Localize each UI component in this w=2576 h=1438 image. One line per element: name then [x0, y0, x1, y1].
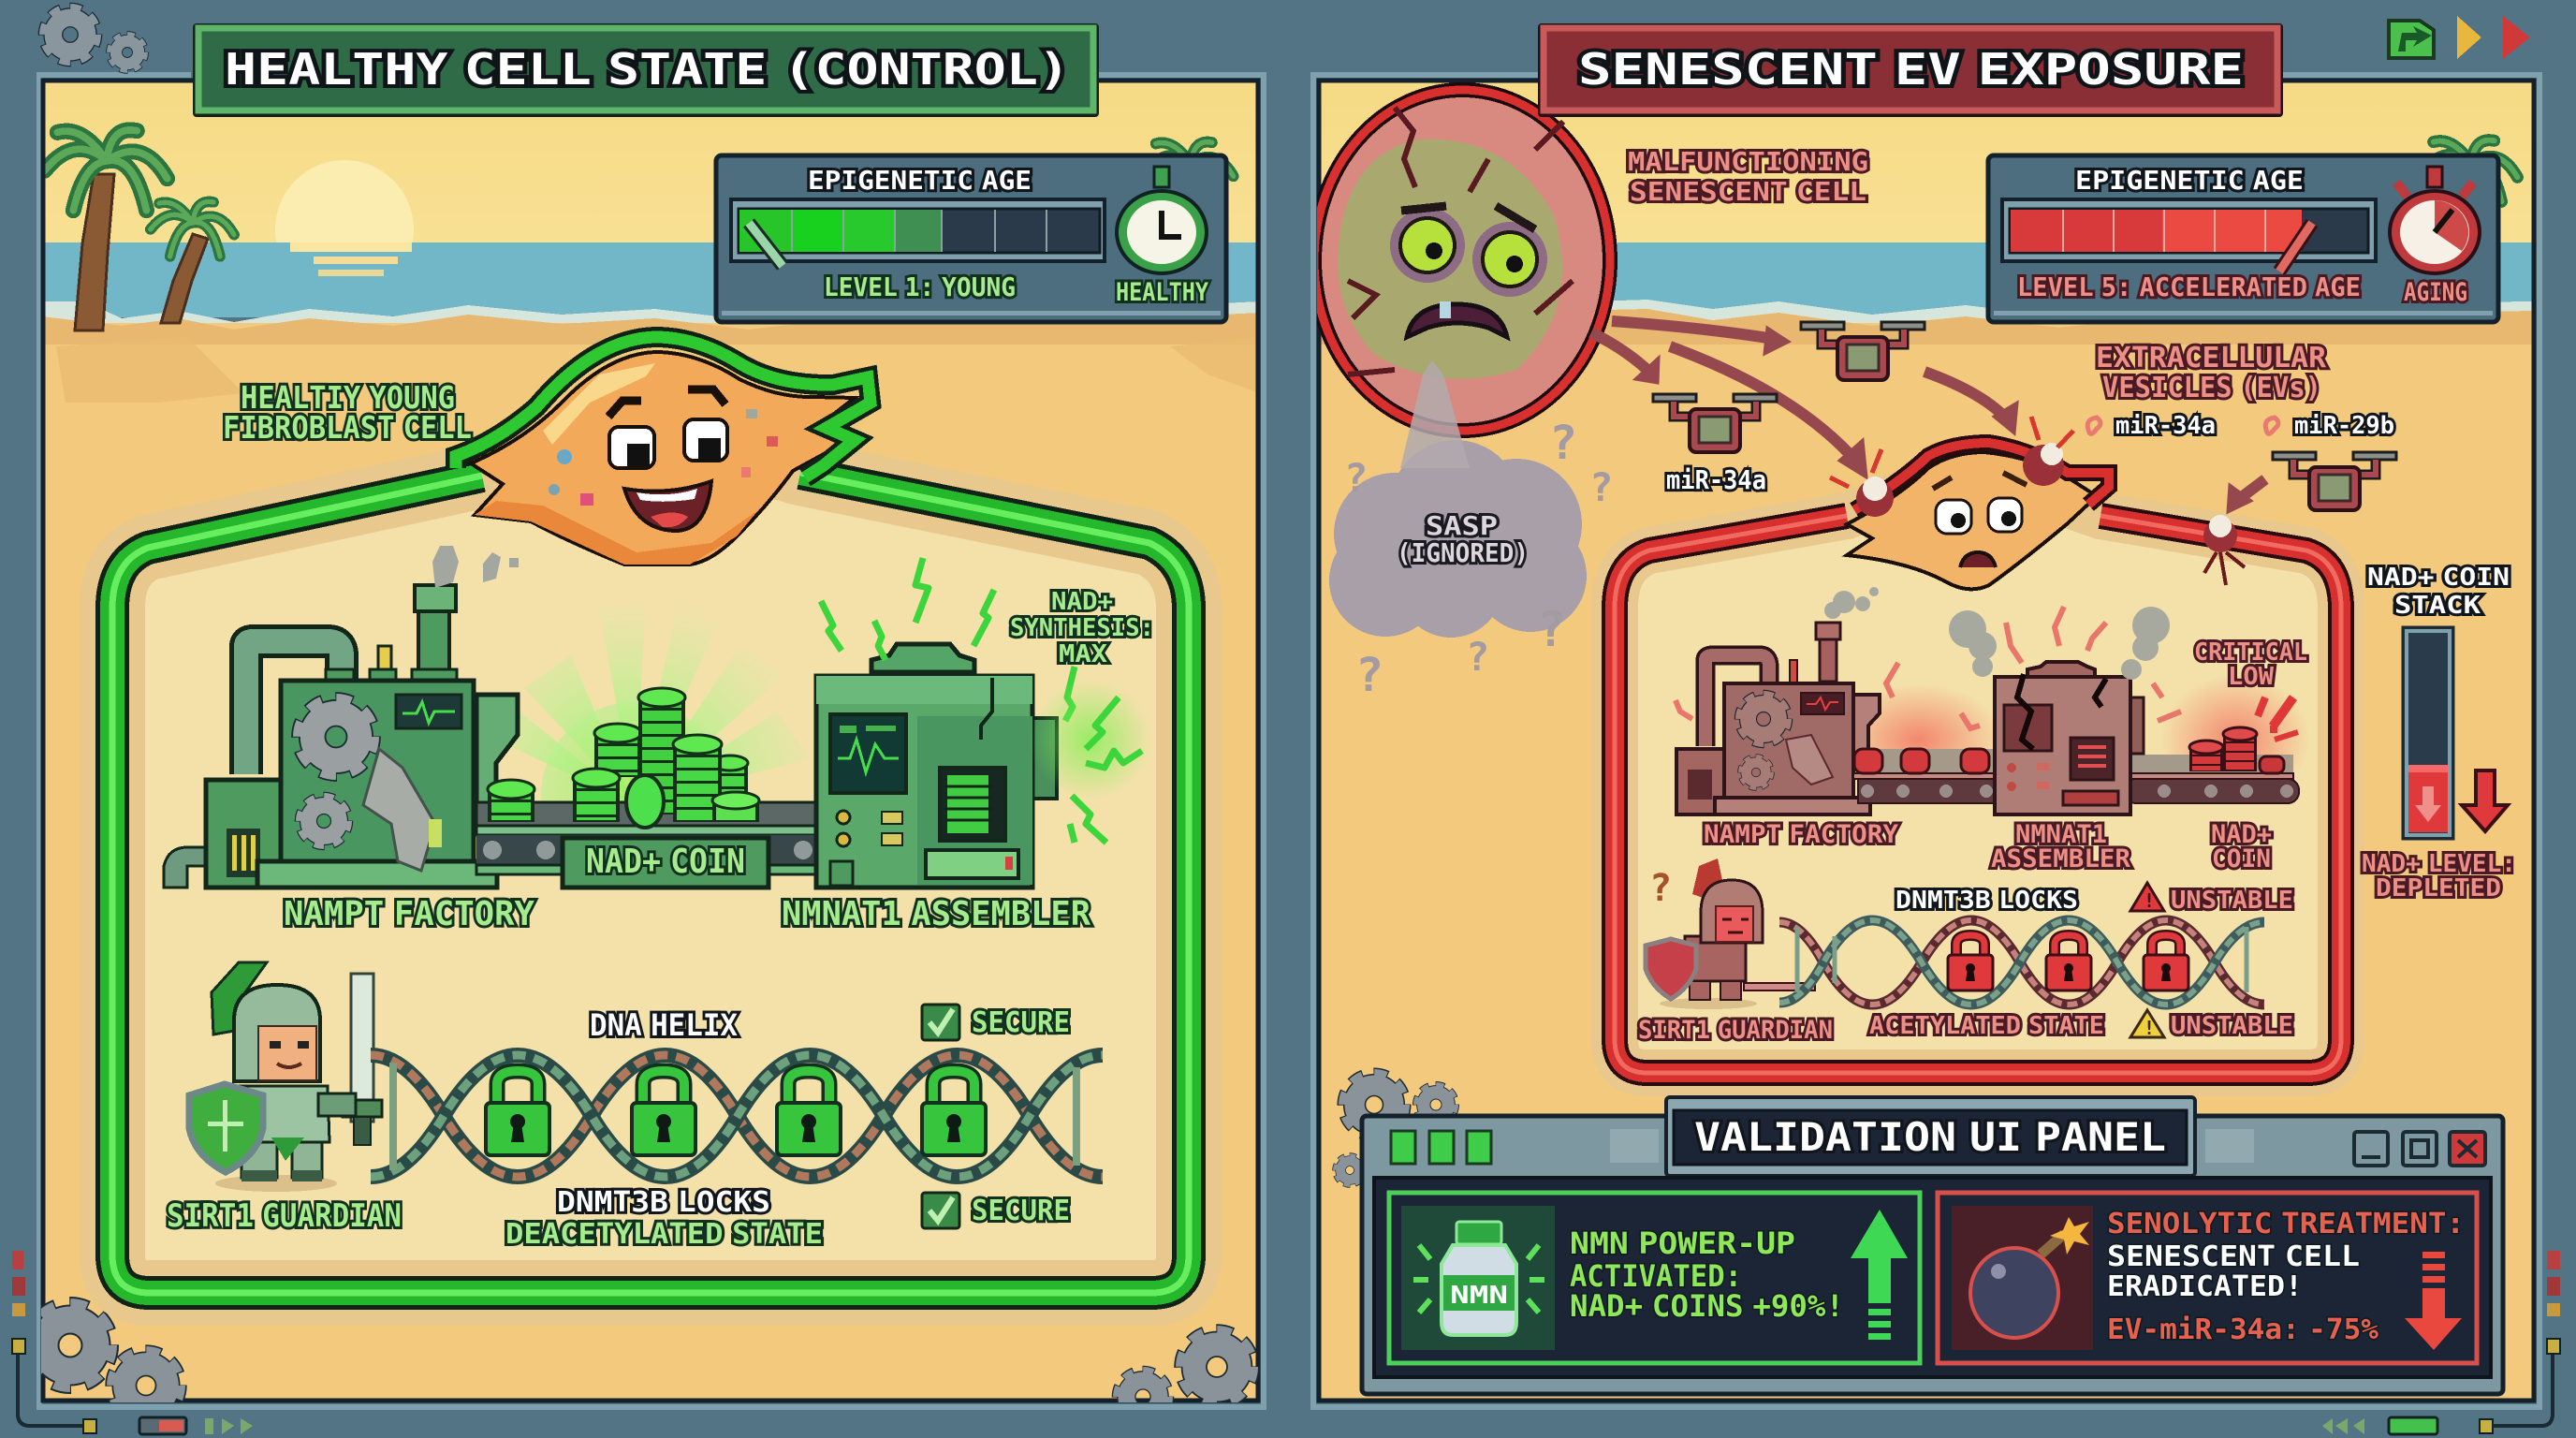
bottom right console decor — [2322, 1251, 2560, 1434]
card: NMN power-up — [1389, 1193, 1920, 1363]
panel title tab — [1666, 1097, 2195, 1176]
cell membrane damaged — [1615, 468, 2341, 1073]
label: critical low: LOW — [2228, 663, 2274, 691]
label: SIRT1 guardian: SIRT1 GUARDIAN — [167, 1197, 402, 1235]
label: critical low: CRITICAL — [2194, 638, 2307, 667]
label: NAD+ synthesis max — [1010, 588, 1154, 668]
card: senolytic treatment — [1938, 1193, 2477, 1363]
label plate: NAD+ coin: NAD+ COIN — [586, 843, 745, 881]
broken NMNAT1 assembler — [1995, 662, 2144, 814]
panel frame — [39, 75, 1264, 1407]
secure badge bottom: SECURE — [972, 1195, 1070, 1227]
unstable badge yellow: ! — [2144, 1017, 2155, 1039]
stopwatch icon: aging — [2390, 167, 2480, 273]
label: DNMT3B locks deacetylated state: DEACETYLATED STATE — [505, 1218, 823, 1251]
secure badge top: SECURE — [972, 1006, 1070, 1039]
broken factory gears — [1739, 695, 1833, 787]
unstable badge red — [2130, 883, 2293, 915]
label: NMNAT1 assembler: ASSEMBLER — [1991, 844, 2131, 873]
malfunctioning senescent cell — [1314, 90, 1610, 431]
NAD+ coin stack gauge — [2362, 564, 2516, 902]
SASP plume — [1400, 360, 1470, 468]
card: senolytic treatment: ERADICATED! — [2107, 1270, 2303, 1303]
NMNAT1 assembler — [816, 644, 1057, 888]
NAMPT factory — [164, 585, 518, 888]
label: critical low — [2194, 638, 2307, 691]
stressed fibroblast cell — [1847, 443, 2109, 589]
icon: NMN bottle: NMN — [1450, 1282, 1508, 1310]
factory gears — [300, 700, 442, 871]
DNA helix with locks — [371, 1055, 1103, 1177]
unstable badge red: ! — [2144, 889, 2155, 912]
NAD+ coin stack gauge: NAD+ LEVEL: — [2362, 850, 2516, 878]
window buttons — [2354, 1132, 2485, 1166]
label: NMNAT1 assembler: NMNAT1 ASSEMBLER — [782, 895, 1090, 933]
NAD+ coin stack gauge: DEPLETED — [2376, 874, 2501, 902]
NAD+ coin stack gauge: NAD+ COIN — [2367, 564, 2510, 592]
label: DNA helix: DNA HELIX — [590, 1007, 738, 1043]
epigenetic age meter: young — [716, 155, 1226, 322]
conveyor belt — [476, 802, 816, 874]
title banner: healthy cell state: HEALTHY CELL STATE (CONTROL) — [225, 44, 1070, 95]
NAD+ coin stacks — [488, 688, 759, 828]
SASP cloud: ? — [1344, 455, 1368, 501]
SASP cloud: ? — [1355, 648, 1383, 702]
status LEDs — [1391, 1131, 1491, 1164]
label: DNMT3B locks deacetylated state: DNMT3B LOCKS — [557, 1186, 770, 1219]
face — [549, 389, 778, 531]
label: extracellular vesicles: VESICLES (EVs) — [2102, 372, 2321, 404]
label: SIRT1 guardian: SIRT1 GUARDIAN — [1638, 1016, 1833, 1045]
validation UI panel — [1336, 1075, 2503, 1394]
corner gears — [30, 1305, 1251, 1422]
red sparks — [1676, 607, 2298, 740]
broken conveyor — [1853, 749, 2299, 803]
label: healthy young fibroblast cell — [223, 379, 472, 446]
SASP cloud: (IGNORED) — [1397, 537, 1529, 568]
beach scene left — [41, 79, 1260, 1402]
green energy sparks — [821, 558, 1151, 843]
assembler smoke — [1824, 587, 2170, 680]
arrow down — [2405, 1252, 2462, 1350]
machine smoke — [432, 546, 519, 588]
label: NMNAT1 assembler: NMNAT1 — [2015, 820, 2107, 849]
SASP cloud: ? — [1589, 464, 1613, 510]
unstable DNA helix with locks — [1779, 920, 2264, 1005]
card: NMN power-up: NAD+ COINS +90%! — [1570, 1288, 1844, 1324]
title banner: healthy cell state — [193, 23, 1099, 117]
unstable badge red: UNSTABLE — [2171, 887, 2293, 915]
cell body — [471, 352, 855, 565]
card: senolytic treatment: SENESCENT CELL — [2107, 1240, 2360, 1273]
label: NAD+ coin — [2211, 820, 2272, 873]
SASP cloud: ? — [1549, 416, 1577, 470]
EV drone top — [1801, 322, 1925, 380]
weakened SIRT1 knight: ? — [1649, 867, 1672, 910]
label: DNMT3B locks: DNMT3B LOCKS — [1895, 887, 2078, 915]
label: NAMPT factory: NAMPT FACTORY — [1704, 820, 1899, 849]
NAD+ coin stack gauge: STACK — [2394, 592, 2481, 620]
cell membrane cap — [456, 337, 871, 477]
label: NAD+ coin: COIN — [2212, 844, 2271, 873]
epigenetic age meter: accelerated: AGING — [2404, 278, 2467, 307]
arrow up — [1851, 1210, 1908, 1340]
unstable badge yellow: UNSTABLE — [2171, 1012, 2293, 1040]
top left gears — [44, 8, 145, 70]
title banner: senescent EV exposure — [1538, 23, 2283, 117]
panel: senescent EV exposure — [1313, 23, 2539, 1407]
depleted red coins — [1854, 727, 2284, 773]
broken NAMPT factory — [1676, 623, 1880, 814]
label: extracellular vesicles: EXTRACELLULAR — [2096, 342, 2327, 374]
label: NAD+ coin: NAD+ — [2211, 820, 2272, 849]
card: senolytic treatment: EV-miR-34a: -75% — [2107, 1313, 2378, 1346]
SIRT1 guardian knight — [189, 962, 382, 1192]
label: healthy young fibroblast cell: HEALTIY YOUNG — [241, 379, 455, 416]
label: NAD+ synthesis max: NAD+ — [1051, 588, 1113, 616]
weakened SIRT1 knight — [1646, 858, 1815, 1009]
stopwatch icon: healthy — [1117, 167, 1207, 273]
card: NMN power-up: ACTIVATED: — [1570, 1258, 1742, 1294]
EV legend — [2087, 412, 2394, 440]
card: NMN power-up: NMN POWER-UP — [1570, 1225, 1795, 1261]
epigenetic age meter: young: LEVEL 1: YOUNG — [824, 271, 1016, 302]
panel title tab: VALIDATION UI PANEL — [1694, 1114, 2166, 1160]
label: NMNAT1 assembler — [1991, 820, 2131, 873]
stressed face — [1933, 473, 2027, 567]
card: senolytic treatment: SENOLYTIC TREATMENT: — [2107, 1208, 2465, 1240]
bottom left console decor — [12, 1251, 253, 1434]
SASP cloud: SASP — [1426, 510, 1498, 541]
window vents — [1610, 1129, 2254, 1163]
red glow — [1835, 674, 2310, 805]
EV attack arrows — [1591, 321, 2265, 512]
icon: NMN bottle — [1413, 1222, 1544, 1335]
label: extracellular vesicles — [2096, 342, 2327, 404]
panel frame right — [1313, 75, 2539, 1407]
secure badge top — [922, 1005, 1070, 1040]
label: NAD+ synthesis max: MAX — [1059, 640, 1107, 668]
cell membrane — [112, 431, 1189, 1293]
palm trees — [45, 130, 1234, 330]
epigenetic age meter: young: EPIGENETIC AGE — [808, 165, 1032, 196]
label: acetylated state: ACETYLATED STATE — [1869, 1012, 2104, 1040]
EV legend: miR-34a — [2115, 412, 2216, 440]
label: miR-34a: miR-34a — [1666, 464, 1766, 495]
epigenetic age meter: young: HEALTHY — [1116, 278, 1209, 307]
top right game icons — [2389, 16, 2530, 59]
depletion arrow — [2462, 770, 2508, 831]
impact sites — [1830, 417, 2245, 585]
label plate: NAD+ coin — [563, 838, 768, 888]
epigenetic age meter: accelerated: LEVEL 5: ACCELERATED AGE — [2017, 271, 2361, 302]
EV drone right — [2273, 452, 2396, 510]
label: malfunctioning senescent cell: MALFUNCTIONING — [1628, 146, 1868, 177]
SASP cloud — [1329, 416, 1613, 702]
coin glow rays — [496, 599, 810, 889]
label: malfunctioning senescent cell: SENESCENT CELL — [1630, 176, 1866, 207]
SASP cloud: ? — [1537, 602, 1566, 658]
label: healthy young fibroblast cell: FIBROBLAST CELL — [223, 409, 472, 446]
secure badge bottom — [922, 1193, 1070, 1228]
title banner: senescent EV exposure: SENESCENT EV EXPOSURE — [1578, 44, 2244, 95]
label: DNMT3B locks deacetylated state — [505, 1186, 823, 1251]
label: malfunctioning senescent cell — [1628, 146, 1868, 207]
label: NAMPT factory: NAMPT FACTORY — [284, 895, 534, 933]
panel gears — [1336, 1075, 1455, 1184]
icon: bomb — [1970, 1217, 2089, 1338]
panel: healthy cell state — [30, 23, 1264, 1422]
SASP cloud: ? — [1466, 634, 1489, 680]
EV drone left — [1653, 394, 1777, 452]
unstable badge yellow — [2130, 1010, 2293, 1040]
fibroblast cell character — [456, 337, 871, 565]
EV legend: miR-29b — [2294, 412, 2394, 440]
epigenetic age meter: accelerated: EPIGENETIC AGE — [2075, 165, 2304, 196]
epigenetic age meter: accelerated — [1988, 155, 2498, 322]
beach scene right — [1317, 79, 2536, 1402]
label: NAD+ synthesis max: SYNTHESIS: — [1010, 614, 1154, 642]
